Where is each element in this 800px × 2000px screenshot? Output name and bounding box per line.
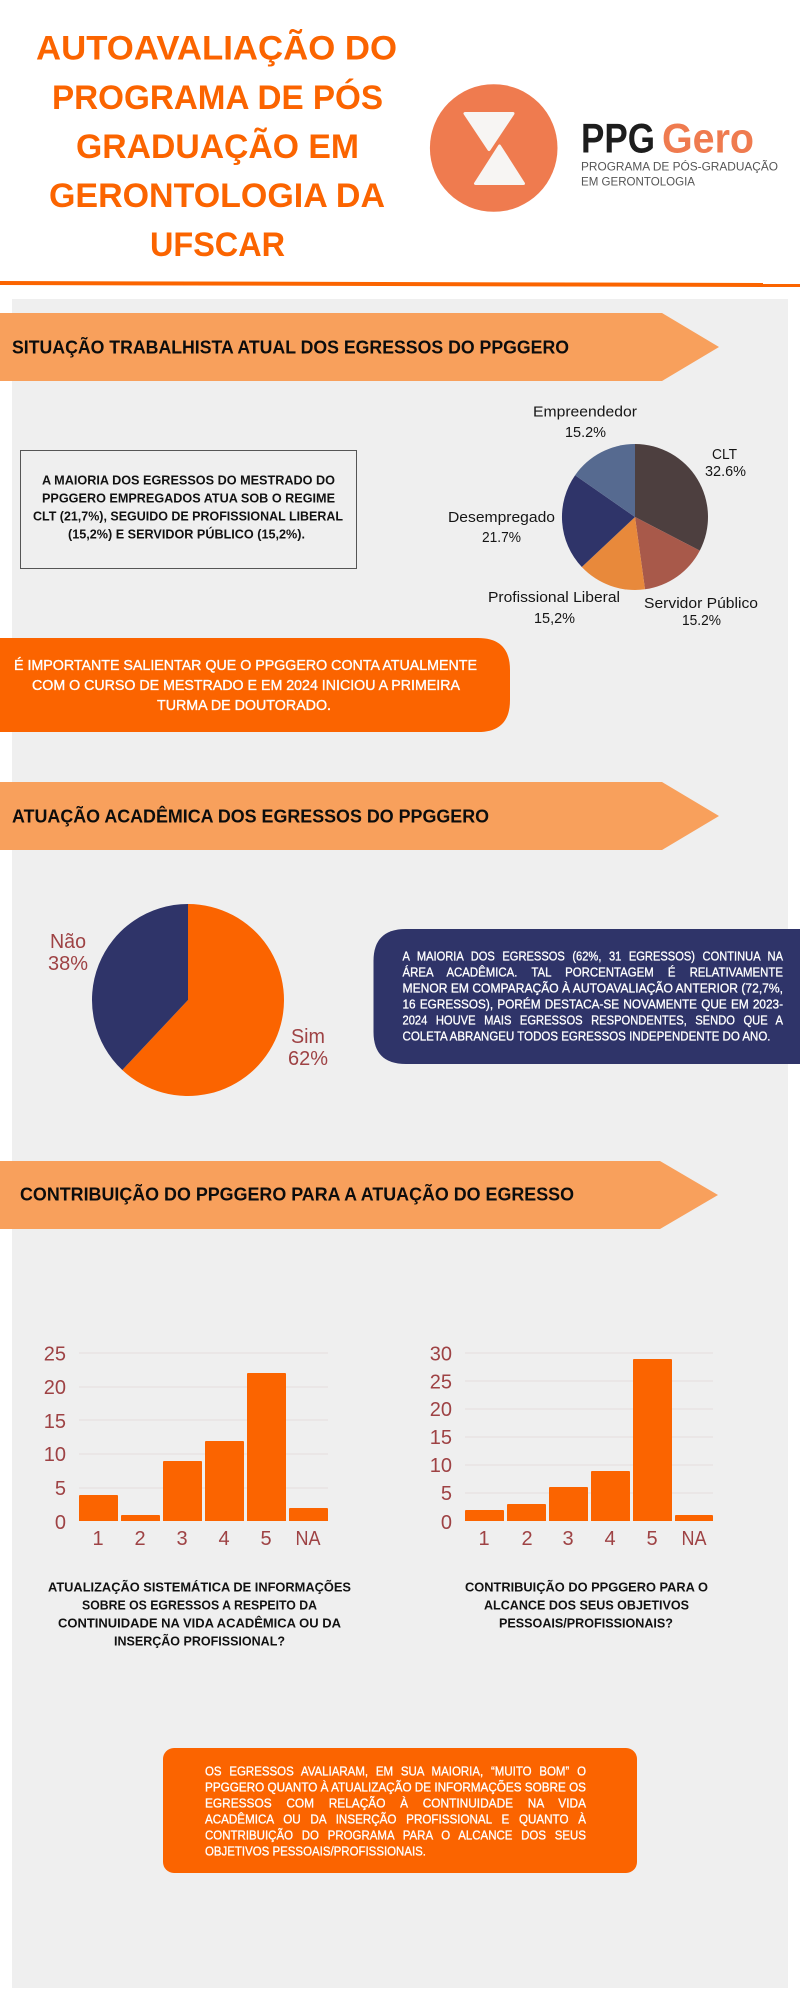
caption: atualização sistemática: SOBRE OS EGRESSOS A RESPEITO DA (82, 1598, 318, 1613)
bar chart: atualização sistemática: 3 (176, 1528, 188, 1550)
bar chart: atualização sistemática: 25 (44, 1344, 66, 1366)
bar chart: atualização sistemática: 15 (44, 1411, 66, 1433)
pie chart: situação trabalhista: Empreendedor (533, 404, 637, 421)
logo wordmark: Gero (662, 114, 754, 161)
caption: atualização sistemática: INSERÇÃO PROFISSIONAL? (114, 1634, 285, 1649)
caption: contribuição do PPGGERO (465, 1580, 708, 1631)
text box: regime de trabalho (20, 450, 356, 568)
caption: atualização sistemática (48, 1580, 351, 1649)
bar chart: contribuição do PPGGERO: 30 (430, 1344, 452, 1366)
bar chart: atualização sistemática: 5 (55, 1478, 66, 1500)
pie chart: situação trabalhista: 21.7% (482, 529, 521, 546)
pie chart: situação trabalhista: 15,2% (534, 610, 575, 627)
bar chart: contribuição do PPGGERO: 4 (604, 1528, 616, 1550)
pie chart: situação trabalhista: Profissional Liberal (488, 589, 620, 606)
title: GRADUAÇÃO EM (76, 128, 359, 166)
caption: contribuição do PPGGERO: CONTRIBUIÇÃO DO PPGGERO PARA O (465, 1580, 708, 1595)
pie chart: situação trabalhista: Servidor Público (644, 595, 758, 612)
callout: avaliação muito bom: OS EGRESSOS AVALIARAM, EM SUA MAIORIA, “MUITO BOM” O (205, 1764, 586, 1778)
bar chart: contribuição do PPGGERO: 0 (441, 1512, 452, 1534)
bar chart: atualização sistemática: 4 (218, 1528, 230, 1550)
pie chart: situação trabalhista: 15.2% (565, 424, 606, 441)
banner: situação trabalhista: SITUAÇÃO TRABALHISTA ATUAL DOS EGRESSOS DO PPGGERO (12, 336, 569, 358)
callout: avaliação muito bom: EGRESSOS COM RELAÇÃO À CONTINUIDADE NA VIDA (205, 1796, 587, 1810)
caption: atualização sistemática: CONTINUIDADE NA VIDA ACADÊMICA OU DA (58, 1616, 342, 1631)
text box: regime de trabalho: CLT (21,7%), SEGUIDO DE PROFISSIONAL LIBERAL (33, 509, 343, 524)
header rule (0, 281, 800, 287)
bar chart: contribuição do PPGGERO: 5 (646, 1528, 658, 1550)
caption: contribuição do PPGGERO: ALCANCE DOS SEUS OBJETIVOS (484, 1598, 689, 1613)
callout: curso de mestrado e doutorado: É IMPORTANTE SALIENTAR QUE O PPGGERO CONTA ATUALMENTE (14, 657, 477, 674)
title: AUTOAVALIAÇÃO DO (36, 29, 397, 67)
callout: atuação acadêmica: 16 EGRESSOS), PORÉM DESTACA-SE NOVAMENTE QUE EM 2023- (402, 996, 783, 1012)
caption: contribuição do PPGGERO: PESSOAIS/PROFISSIONAIS? (499, 1616, 673, 1631)
pie chart: atuação acadêmica: Sim (291, 1026, 325, 1048)
caption: atualização sistemática: ATUALIZAÇÃO SISTEMÁTICA DE INFORMAÇÕES (48, 1580, 351, 1595)
callout: curso de mestrado e doutorado (0, 638, 510, 732)
callout: atuação acadêmica: COLETA ABRANGEU TODOS EGRESSOS INDEPENDENTE DO ANO. (402, 1030, 770, 1044)
callout: atuação acadêmica (374, 929, 800, 1064)
bar chart: contribuição do PPGGERO: 25 (430, 1372, 452, 1394)
callout: avaliação muito bom (163, 1748, 637, 1873)
bar chart: contribuição do PPGGERO: 5 (441, 1483, 452, 1505)
bar chart: contribuição do PPGGERO: 10 (430, 1455, 452, 1477)
bar chart: contribuição do PPGGERO: 3 (562, 1528, 574, 1550)
text box: regime de trabalho: PPGGERO EMPREGADOS ATUA SOB O REGIME (42, 491, 335, 506)
pie chart: atuação acadêmica: 38% (48, 953, 88, 975)
callout: curso de mestrado e doutorado: COM O CURSO DE MESTRADO E EM 2024 INICIOU A PRIMEIRA (32, 678, 460, 694)
banner: contribuição do PPGGERO: CONTRIBUIÇÃO DO PPGGERO PARA A ATUAÇÃO DO EGRESSO (20, 1184, 574, 1204)
bar chart: atualização sistemática: 2 (134, 1528, 146, 1550)
callout: curso de mestrado e doutorado: TURMA DE DOUTORADO. (157, 698, 331, 714)
text box: regime de trabalho: A MAIORIA DOS EGRESSOS DO MESTRADO DO (42, 473, 335, 488)
bar chart: contribuição do PPGGERO: 1 (478, 1528, 490, 1550)
bar chart: atualização sistemática: 0 (55, 1512, 66, 1534)
pie chart: situação trabalhista: 32.6% (705, 463, 746, 480)
bar chart: contribuição do PPGGERO: NA (682, 1528, 707, 1550)
banner: contribuição do PPGGERO (0, 1161, 718, 1229)
banner: situação trabalhista (0, 313, 719, 381)
pie chart: atuação acadêmica (48, 904, 328, 1096)
callout: avaliação muito bom: ACADÊMICA OU DA INSERÇÃO PROFISSIONAL E QUANTO À (205, 1812, 587, 1826)
pie chart: atuação acadêmica: Não (50, 931, 86, 953)
callout: avaliação muito bom: CONTRIBUIÇÃO DO PROGRAMA PARA O ALCANCE DOS SEUS (205, 1828, 586, 1842)
logo wordmark: PROGRAMA DE PÓS-GRADUAÇÃO (581, 161, 778, 174)
pie chart: situação trabalhista (448, 404, 758, 629)
bar chart: atualização sistemática: 20 (44, 1377, 66, 1399)
bar chart: atualização sistemática: NA (296, 1528, 321, 1550)
title: GERONTOLOGIA DA (49, 177, 385, 215)
pie chart: situação trabalhista: Desempregado (448, 509, 555, 526)
bar chart: contribuição do PPGGERO (430, 1344, 713, 1550)
text box: regime de trabalho: (15,2%) E SERVIDOR PÚBLICO (15,2%). (68, 527, 305, 542)
bar chart: atualização sistemática: 5 (260, 1528, 272, 1550)
pie chart: situação trabalhista: 15.2% (682, 612, 721, 629)
banner: atuação acadêmica: ATUAÇÃO ACADÊMICA DOS EGRESSOS DO PPGGERO (12, 806, 489, 826)
title (36, 29, 397, 264)
bar chart: contribuição do PPGGERO: 20 (430, 1399, 452, 1421)
callout: avaliação muito bom: OBJETIVOS PESSOAIS/PROFISSIONAIS. (205, 1844, 426, 1858)
logo wordmark: EM GERONTOLOGIA (581, 176, 695, 188)
logo wordmark (581, 114, 778, 188)
bar chart: atualização sistemática (44, 1344, 328, 1550)
callout: avaliação muito bom: PPGGERO QUANTO À ATUALIZAÇÃO DE INFORMAÇÕES SOBRE OS (205, 1780, 586, 1794)
bar chart: atualização sistemática: 1 (92, 1528, 104, 1550)
bar chart: atualização sistemática: 10 (44, 1444, 66, 1466)
title: PROGRAMA DE PÓS (52, 79, 383, 117)
bar chart: contribuição do PPGGERO: 2 (521, 1528, 533, 1550)
logo wordmark: PPG (581, 114, 655, 161)
icon: PPGGero logo mark (430, 84, 558, 212)
callout: atuação acadêmica: MENOR EM COMPARAÇÃO À AUTOAVALIAÇÃO ANTERIOR (72,7%, (402, 980, 783, 996)
bar chart: contribuição do PPGGERO: 15 (430, 1427, 452, 1449)
title: UFSCAR (150, 226, 285, 264)
pie chart: situação trabalhista: CLT (712, 446, 737, 463)
banner: atuação acadêmica (0, 782, 719, 850)
pie chart: atuação acadêmica: 62% (288, 1048, 328, 1070)
